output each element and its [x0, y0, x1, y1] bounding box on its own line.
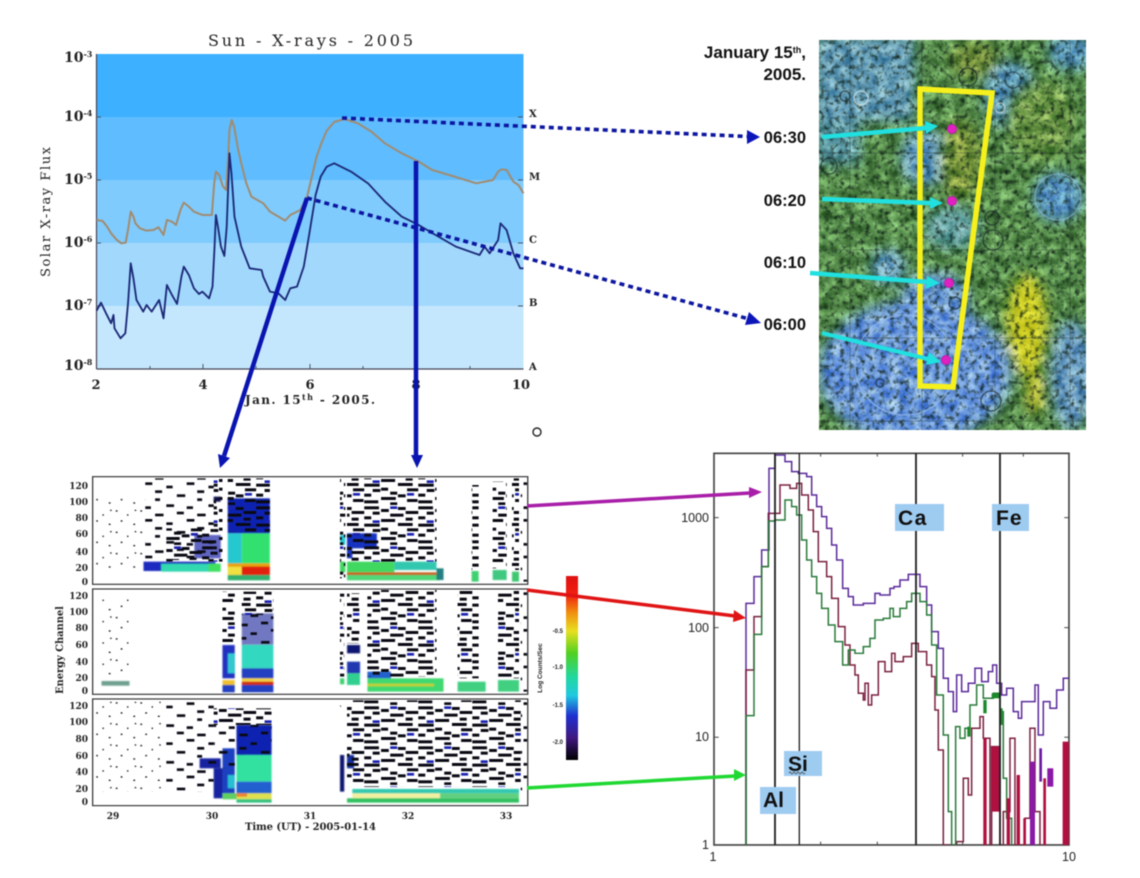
colour scale bar: -1.0	[553, 665, 564, 671]
flare class letters: B	[529, 298, 537, 309]
noise bars	[967, 693, 1069, 845]
map date heading: 2005.	[763, 65, 806, 84]
panel: X-ray spectrum chart	[681, 453, 1076, 864]
energy channel tick labels: 60	[75, 530, 88, 540]
colour scale bar: Log Counts/Sec	[537, 643, 544, 693]
x axis labels: 4	[198, 378, 208, 393]
spectrum x axis labels: 10	[1062, 850, 1076, 864]
energy channel tick labels	[69, 482, 88, 808]
map time labels: 06:10	[764, 254, 806, 272]
x axis labels: 6	[305, 378, 315, 393]
map date heading: th	[793, 45, 801, 55]
label: Fe	[992, 504, 1029, 531]
flare class letters	[528, 109, 540, 373]
energy channel tick labels: 60	[75, 752, 88, 762]
y axis labels	[64, 49, 93, 374]
spectrum x axis labels	[710, 850, 1076, 864]
terrain colour regions	[815, 34, 1096, 444]
label: Al	[760, 787, 796, 814]
map date heading	[704, 43, 806, 84]
spectrum y axis labels: 1	[702, 838, 709, 852]
spectrogram middle	[93, 589, 528, 694]
flare class letters: M	[529, 172, 540, 183]
spectrum frame and ticks	[714, 453, 1069, 845]
solid arrow: decay phase to spectrogram	[411, 161, 423, 468]
energy channel tick labels: 120	[69, 592, 88, 602]
yellow orbit footprint	[920, 89, 992, 387]
y axis labels: 10	[64, 235, 83, 251]
energy channel tick labels: 100	[69, 608, 88, 618]
energy channel tick labels: 0	[82, 687, 88, 697]
x axis labels: 2	[91, 378, 101, 393]
y axis labels: -4	[83, 108, 93, 118]
energy channel tick labels: 80	[75, 514, 88, 524]
label: Fe: Fe	[996, 507, 1023, 530]
flare class bands	[96, 54, 524, 369]
label: Si: Si	[788, 753, 808, 776]
spectrum y axis labels: 10	[695, 730, 709, 744]
energy channel tick labels: 60	[75, 641, 88, 651]
panel: energy channel spectrograms	[55, 477, 528, 833]
energy channel tick labels: 20	[75, 674, 88, 684]
colour scale bar: -1.5	[553, 703, 564, 709]
y axis labels: 10	[64, 298, 83, 314]
x axis title: Jan. 15	[245, 393, 301, 407]
colour scale bar: -0.5	[553, 629, 564, 635]
small circle marker	[533, 428, 541, 436]
x axis title: th	[302, 392, 313, 402]
time tick labels: 32	[402, 812, 414, 822]
energy channel tick labels: 100	[69, 718, 88, 728]
energy channel tick labels: 20	[75, 564, 88, 574]
y axis labels: 10	[64, 172, 83, 188]
map time labels: 06:20	[764, 192, 806, 210]
y axis labels: -5	[83, 171, 92, 181]
y axis labels: 10	[64, 50, 83, 66]
map date heading: January 15	[704, 43, 793, 62]
time tick labels: 33	[500, 812, 512, 822]
arrow: middle spectrogram to maroon spectrum	[527, 590, 746, 622]
energy channel tick labels: 40	[75, 768, 88, 778]
craters	[821, 68, 1081, 415]
spectrogram top	[93, 477, 528, 584]
y axis labels: 10	[64, 358, 83, 374]
spectrum curves	[746, 455, 1069, 845]
map time labels: 06:00	[764, 316, 806, 334]
purple spectrum	[746, 455, 1069, 845]
energy channel tick labels: 20	[75, 785, 88, 795]
panel: solar X-ray flux chart	[39, 31, 540, 407]
energy channel tick labels: 100	[69, 498, 88, 508]
label: Ca	[895, 504, 944, 531]
energy channel tick labels: 80	[75, 624, 88, 634]
arrow: bottom spectrogram to green spectrum	[527, 769, 746, 788]
y axis labels: -3	[83, 49, 93, 59]
map grid lines	[819, 40, 1086, 430]
curve: low energy channel flux	[97, 153, 523, 338]
energy channel tick labels: 0	[82, 578, 88, 588]
flare class letters: X	[529, 109, 537, 120]
time tick labels: 31	[304, 812, 316, 822]
flare class letters: A	[528, 362, 537, 373]
energy channel tick labels: 120	[69, 702, 88, 712]
label: Al: Al	[763, 789, 784, 812]
dotted arrow: flare peak to 06:30	[342, 118, 760, 144]
maroon spectrum	[746, 483, 1040, 845]
green spectrum	[746, 500, 1012, 845]
y axis labels: 10	[64, 109, 83, 125]
element lines	[775, 453, 1000, 845]
energy channel tick labels: 0	[82, 798, 88, 808]
energy channel tick labels: 40	[75, 658, 88, 668]
terrain texture	[819, 40, 1086, 430]
spectrum y axis labels	[681, 511, 709, 852]
map time labels: 06:30	[764, 129, 806, 147]
energy channel tick labels: 80	[75, 735, 88, 745]
footprint locations	[942, 124, 956, 364]
time axis title: Time (UT) - 2005-01-14	[245, 822, 376, 833]
y axis labels: -7	[83, 297, 92, 307]
spectrogram bottom	[93, 699, 528, 806]
dotted arrow: flare start to 06:00	[307, 198, 761, 325]
curve: high energy channel flux	[97, 119, 523, 243]
spectrum x axis labels: 1	[710, 850, 717, 864]
energy channel axis title: Energy Channel	[55, 606, 66, 694]
y axis labels: -8	[83, 357, 93, 367]
spectrum y axis labels: 1000	[681, 511, 709, 525]
time tick labels: 29	[107, 812, 119, 822]
colour scale bar: -2.0	[553, 740, 564, 746]
solid arrow: flare start to spectrogram	[218, 198, 307, 468]
cyan arrows to footprints	[810, 121, 943, 365]
label: Ca: Ca	[898, 507, 928, 530]
energy channel tick labels: 120	[69, 482, 88, 492]
map time labels	[764, 129, 806, 334]
time tick labels: 30	[206, 812, 218, 822]
flare class letters: C	[529, 235, 537, 246]
panel: lunar terrain map	[815, 34, 1096, 444]
label: Si	[784, 751, 822, 776]
x axis labels	[91, 378, 530, 393]
colour scale bar	[537, 576, 578, 760]
x axis title: - 2005.	[314, 393, 375, 407]
x axis labels: 10	[512, 378, 530, 393]
x axis labels: 8	[411, 378, 421, 393]
energy channel tick labels: 40	[75, 548, 88, 558]
y axis title: Solar X-ray Flux	[39, 146, 54, 277]
time tick labels	[107, 812, 512, 822]
arrow: top spectrogram to purple spectrum	[527, 487, 762, 506]
y axis labels: -6	[83, 234, 93, 244]
spectrum y axis labels: 100	[688, 621, 709, 635]
chart title: Sun - X-rays - 2005	[208, 31, 413, 50]
map date heading: ,	[801, 43, 806, 62]
